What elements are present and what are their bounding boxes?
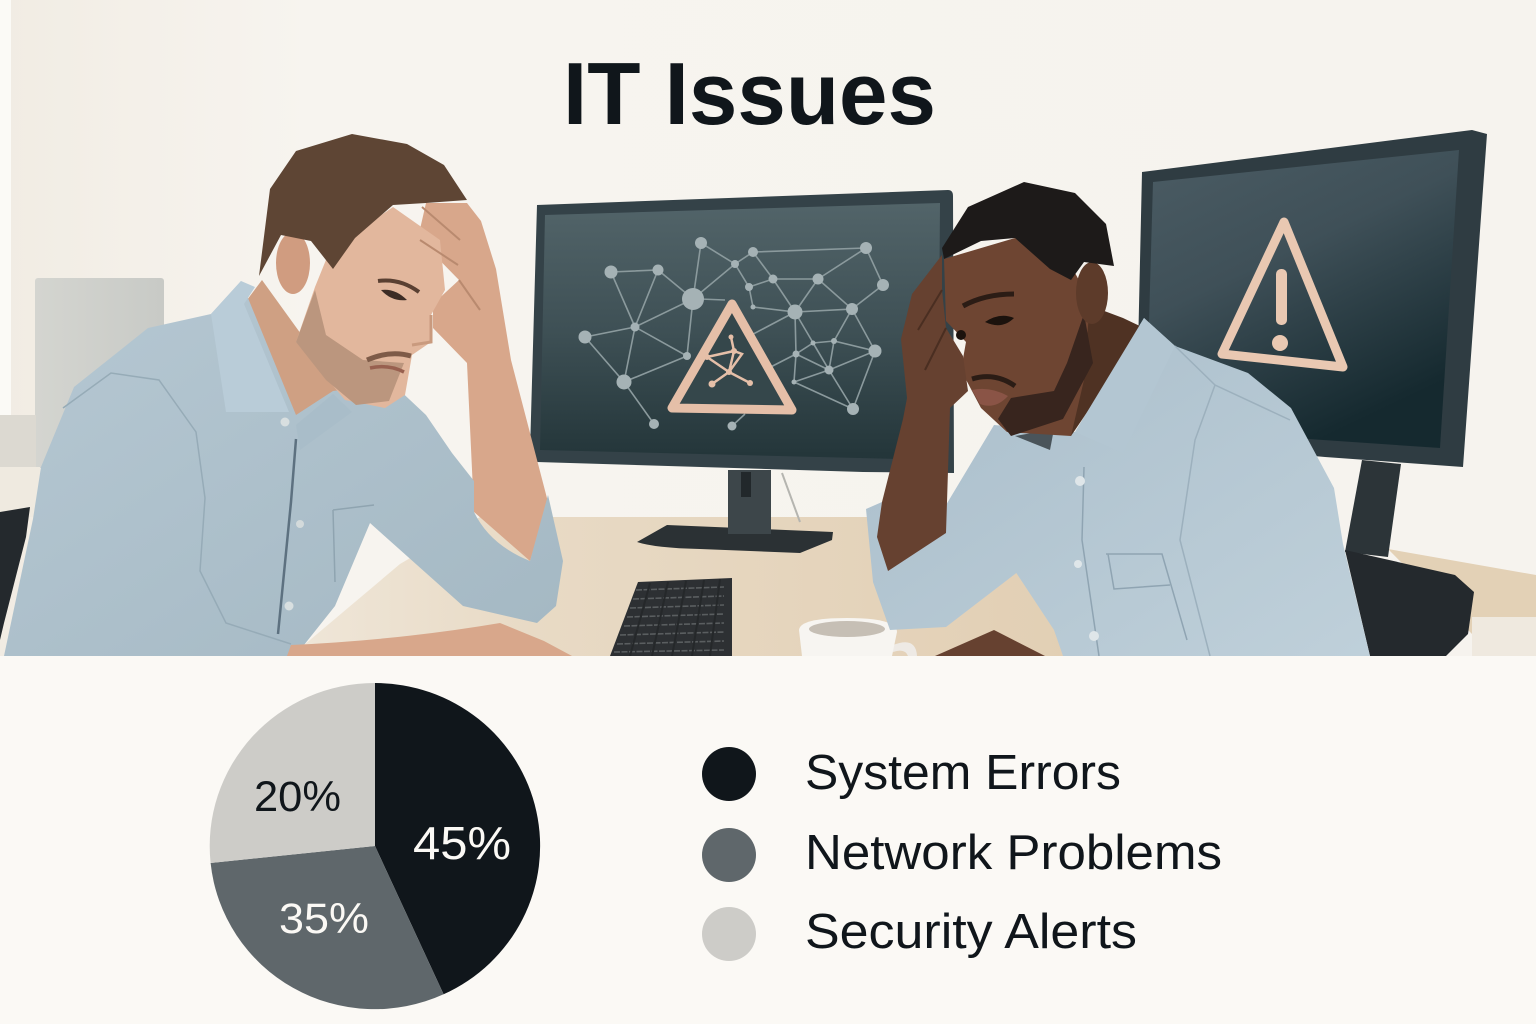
eyes and brow [956,294,1014,340]
eye and brow [378,280,419,300]
face [296,207,445,408]
ear [1076,262,1108,324]
slice: security alerts 20% [210,683,375,863]
nose and mouth [367,315,431,372]
monitor stand [1345,460,1401,557]
monitor: network diagram with warning [530,190,954,553]
label 45%: 45% [413,817,511,869]
legend item: security alerts [702,905,1137,961]
ear [276,232,310,294]
face [944,238,1090,436]
slice: system errors 45% [375,683,540,994]
neck [1071,300,1144,436]
legend item: security alerts: Security Alerts [805,905,1137,959]
hair [942,182,1114,280]
torso and shirt [4,281,563,656]
neck [244,280,345,450]
warning triangle [1222,222,1343,367]
shirt pocket [333,505,374,582]
placket and buttons [278,418,304,634]
beard [998,314,1093,436]
monitor: warning right [1136,130,1487,557]
keyboard [610,578,732,656]
stubble [296,290,404,405]
bottom panel [0,656,1536,1024]
hair [259,134,467,276]
moustache and mouth [972,377,1015,406]
warning triangle with network [672,304,792,410]
raised arm and hand [418,203,548,561]
legend item: network problems: Network Problems [805,826,1222,880]
label 35%: 35% [279,895,369,943]
desk [300,517,1536,656]
placket and buttons [1074,467,1099,656]
collar [211,281,289,412]
legend [702,746,1222,961]
label 20%: 20% [254,773,341,821]
sleeve seam [1175,346,1290,656]
lower hand [287,623,572,656]
photo background: office wall [0,0,1536,656]
chair [1345,550,1474,656]
raised arm and hand [877,255,968,571]
person left [0,134,572,656]
coffee cup [799,618,917,656]
pocket [1106,554,1187,640]
legend item: system errors: System Errors [805,746,1121,800]
person right [866,182,1474,656]
fingers [420,207,480,310]
monitor stand [637,470,833,553]
sleeve seam [63,373,291,644]
pie chart [210,683,540,1009]
torso and shirt [866,318,1370,656]
network graph [585,243,883,426]
fingers [918,290,946,370]
chair [0,507,30,640]
title: IT Issues [563,44,936,143]
lower hand [935,630,1045,656]
slice: network problems 35% [211,846,444,1009]
network nodes [578,237,889,430]
collar [1075,318,1175,453]
